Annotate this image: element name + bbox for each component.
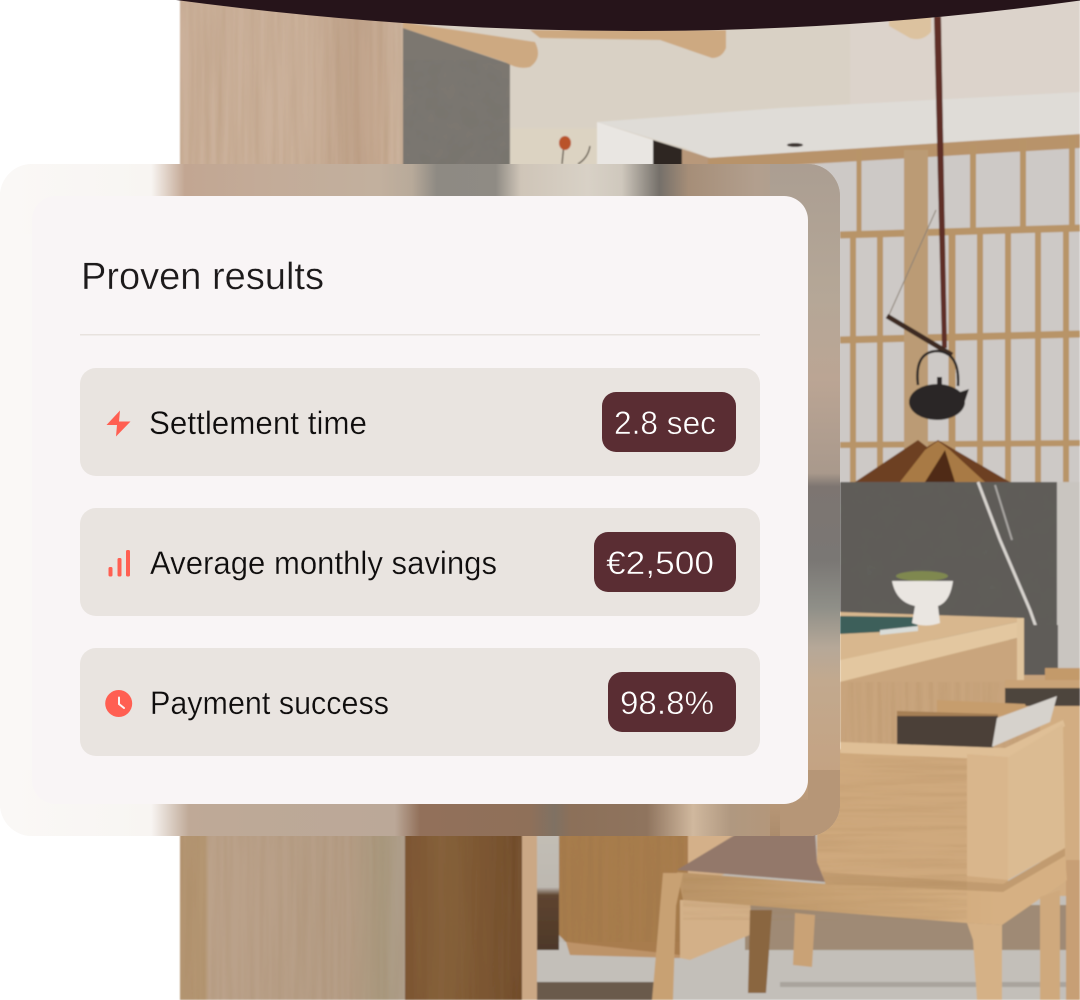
- lower brown column: [405, 830, 559, 1000]
- grey concrete panel: [403, 28, 510, 170]
- top dark arc: [176, 0, 1080, 31]
- badge: 98.8%: [608, 672, 736, 732]
- scene backdrop below table: [840, 640, 1080, 900]
- back wall and ceiling: [403, 0, 1080, 170]
- firewood pile: [855, 440, 1010, 482]
- label: average monthly savings: Average monthly savings: [150, 545, 497, 581]
- row: settlement time: [80, 368, 760, 476]
- badge: €2,500: [594, 532, 736, 592]
- divider: [80, 334, 760, 336]
- icon: clock: [105, 690, 132, 717]
- low cabinet: [559, 830, 815, 960]
- label: settlement time: Settlement time: [149, 405, 367, 441]
- results card: [32, 196, 808, 804]
- table with book and bowl: [840, 571, 1080, 760]
- rounded ceiling beams: [403, 16, 931, 68]
- decorative orange fruit branch: [559, 136, 590, 164]
- wooden left wall: [180, 0, 405, 1000]
- marble counter: [840, 482, 1080, 712]
- row: average monthly savings: [80, 508, 760, 616]
- row: payment success: [80, 648, 760, 756]
- second chair: [1005, 668, 1080, 1000]
- icon: bar chart: [108, 550, 130, 576]
- badge: 98.8%: 98.8%: [620, 685, 714, 721]
- glass frame bottom-right corner: [780, 770, 840, 836]
- floor: [537, 830, 1080, 1000]
- hanging rod and kettle: [887, 16, 969, 420]
- shoji screen: [708, 134, 1080, 482]
- label: payment success: Payment success: [150, 685, 389, 721]
- icon: lightning bolt: [106, 410, 130, 436]
- badge: 2.8 sec: [602, 392, 736, 452]
- badge: 2.8 sec: 2.8 sec: [614, 405, 716, 441]
- badge: €2,500: €2,500: [606, 545, 714, 581]
- chair: [652, 696, 1067, 1000]
- title: Proven results: [81, 256, 324, 298]
- glass panel frame: [0, 164, 840, 836]
